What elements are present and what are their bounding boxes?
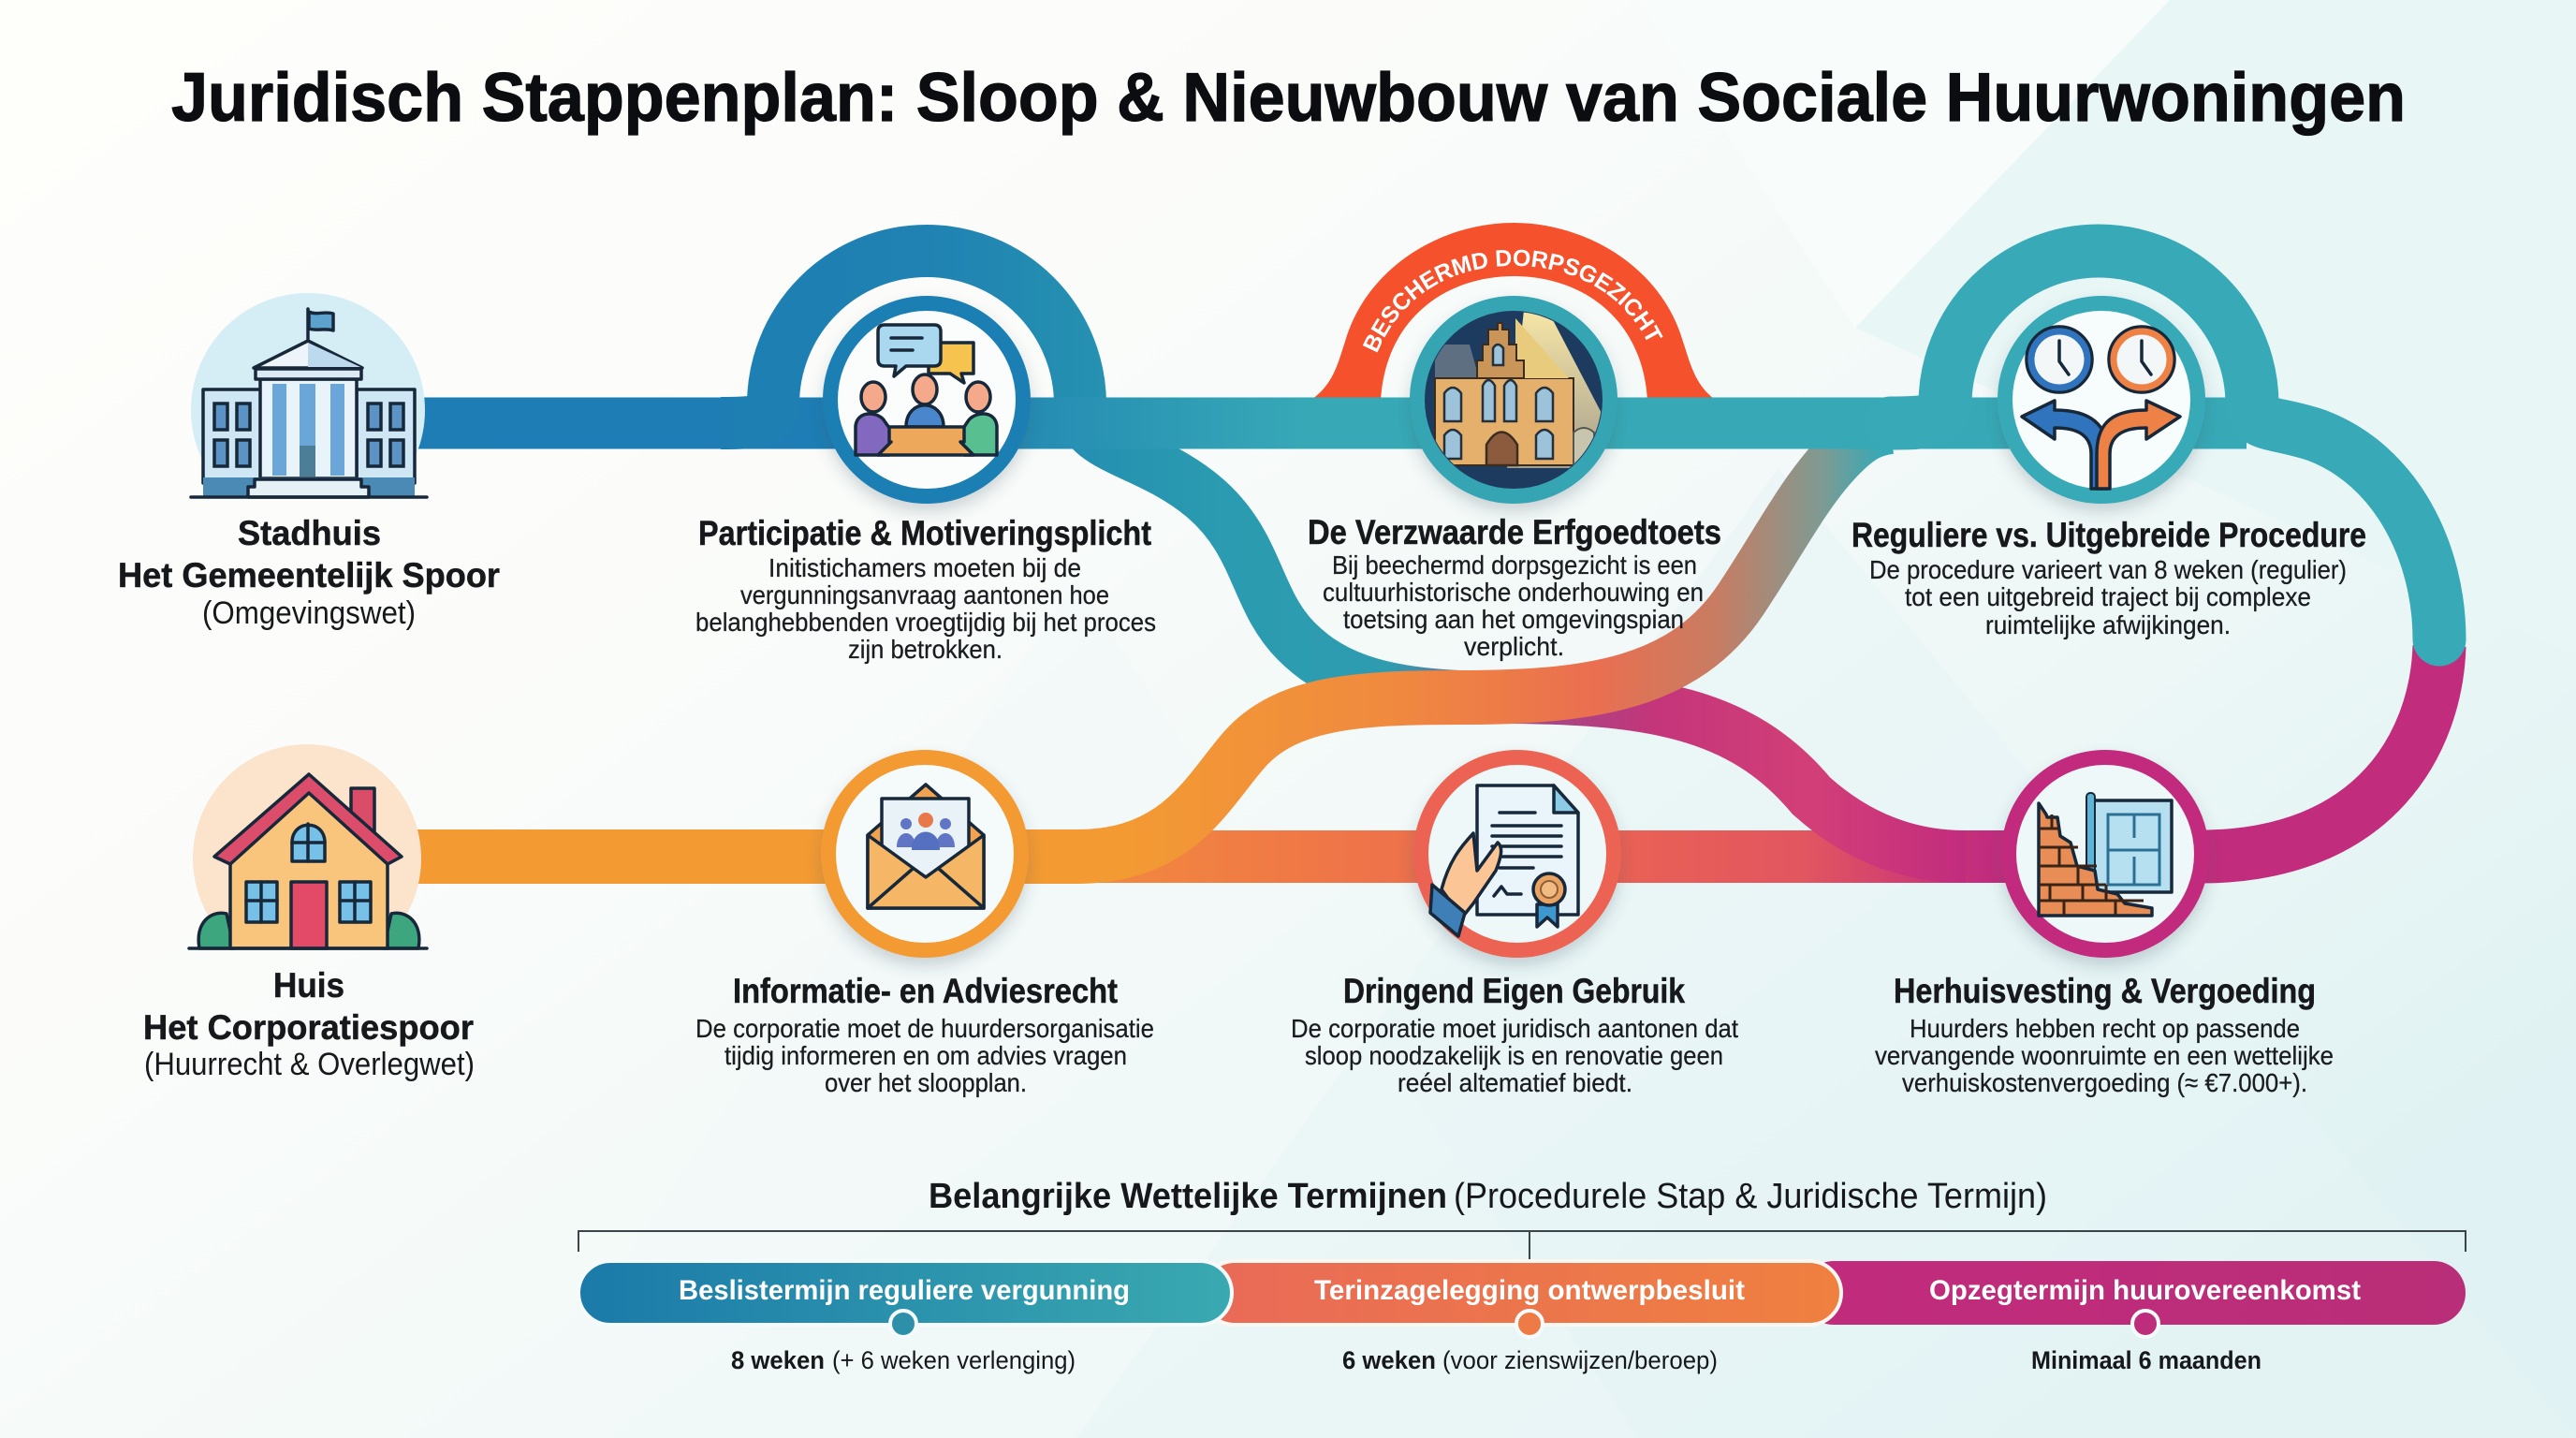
route: magenta link xyxy=(2200,646,2439,857)
route: teal loop xyxy=(1891,251,2439,639)
body text: Huurders hebben recht op passende xyxy=(1910,1014,2300,1043)
deadline values: Minimaal 6 maanden xyxy=(2031,1346,2261,1374)
step: participatie xyxy=(695,303,1156,664)
step: informatie xyxy=(695,757,1154,1097)
bar labels: Opzegtermijn huurovereenkomst xyxy=(1929,1275,2361,1306)
step: eigen gebruik xyxy=(1291,757,1738,1097)
body text xyxy=(1875,1014,2334,1097)
body text: sloop noodzakelijk is en renovatie geen xyxy=(1305,1041,1723,1070)
body text: toetsing aan het omgevingspian xyxy=(1343,605,1684,634)
heading: Herhuisvesting & Vergoeding xyxy=(1894,972,2316,1010)
node ring xyxy=(2009,757,2202,950)
deadline values: 8 weken xyxy=(731,1346,825,1374)
body text: over het sloopplan. xyxy=(825,1068,1027,1097)
icon: heritage building xyxy=(1435,310,1605,468)
heading: Reguliere vs. Uitgebreide Procedure xyxy=(1852,516,2366,554)
deadlines section xyxy=(578,1177,2466,1374)
step: erfgoedtoets xyxy=(1308,303,1721,661)
route: blue left track xyxy=(412,397,945,449)
node ring xyxy=(830,303,1023,496)
route: top track xyxy=(936,397,2247,449)
body text: De procedure varieert van 8 weken (regulier) xyxy=(1869,555,2347,584)
icon: city hall xyxy=(189,293,429,499)
body text: De corporatie moet juridisch aantonen dat xyxy=(1291,1014,1738,1043)
deadline values: (voor zienswijzen/beroep) xyxy=(1442,1346,1718,1374)
stadhuis label: (Omgevingswet) xyxy=(202,595,416,631)
body text: ruimtelijke afwijkingen. xyxy=(1985,610,2231,639)
icon: house xyxy=(189,744,427,973)
body text xyxy=(1869,555,2347,639)
body text: Initistichamers moeten bij de xyxy=(768,553,1081,582)
body text xyxy=(1291,1014,1738,1097)
body text: reéel altematief biedt. xyxy=(1398,1068,1632,1097)
huis label: (Huurrecht & Overlegwet) xyxy=(144,1047,475,1082)
route network xyxy=(376,223,2439,857)
stadhuis label: Het Gemeentelijk Spoor xyxy=(118,556,500,594)
body text: verhuiskostenvergoeding (≈ €7.000+). xyxy=(1902,1068,2307,1097)
body text: vervangende woonruimte en een wettelijke xyxy=(1875,1041,2334,1070)
deadlines heading: Belangrijke Wettelijke Termijnen xyxy=(929,1177,1447,1216)
route: orange rising xyxy=(376,427,1891,857)
body text: tot een uitgebreid traject bij complexe xyxy=(1905,582,2311,611)
icon: clocks and arrows xyxy=(2022,327,2180,489)
stadhuis label xyxy=(118,514,500,631)
body text xyxy=(695,1014,1154,1097)
deadline values: 6 weken xyxy=(1342,1346,1436,1374)
node ring xyxy=(1417,303,1610,496)
step: procedure xyxy=(1852,303,2366,639)
bar: terinzagelegging xyxy=(1203,1261,1841,1325)
body text: tijdig informeren en om advies vragen xyxy=(724,1041,1127,1070)
bar: beslistermijn xyxy=(578,1261,1232,1325)
huis label xyxy=(143,966,475,1082)
body text: Bij beechermd dorpsgezicht is een xyxy=(1332,550,1697,580)
icon: document and hand xyxy=(1430,785,1578,936)
bar: opzegtermijn xyxy=(1802,1261,2466,1325)
icon: envelope xyxy=(868,785,984,908)
body text xyxy=(695,553,1156,664)
heading: Dringend Eigen Gebruik xyxy=(1343,972,1685,1010)
body text: cultuurhistorische onderhouwing en xyxy=(1323,578,1704,607)
heading: Participatie & Motiveringsplicht xyxy=(698,514,1151,552)
huis label: Het Corporatiespoor xyxy=(143,1008,474,1047)
body text: vergunningsanvraag aantonen hoe xyxy=(740,580,1109,609)
node ring xyxy=(2005,303,2198,496)
timeline dots xyxy=(890,1311,2159,1337)
route: bottom track xyxy=(1076,830,2209,883)
stadhuis label: Stadhuis xyxy=(238,514,381,552)
huis label: Huis xyxy=(273,966,344,1005)
icon: meeting xyxy=(856,325,997,455)
deadline values xyxy=(731,1346,2261,1374)
bar labels xyxy=(679,1275,2361,1306)
body text: belanghebbenden vroegtijdig bij het proces xyxy=(695,608,1156,637)
heading: Informatie- en Adviesrecht xyxy=(733,972,1118,1010)
bar labels: Terinzagelegging ontwerpbesluit xyxy=(1314,1275,1745,1306)
heading: De Verzwaarde Erfgoedtoets xyxy=(1308,513,1721,551)
arc label: BESCHERMD DORPSGEZICHT xyxy=(1363,249,1662,352)
route: blue S curve xyxy=(721,251,1966,857)
body text: De corporatie moet de huurdersorganisatie xyxy=(695,1014,1154,1043)
body text: zijn betrokken. xyxy=(848,635,1003,664)
body text: verplicht. xyxy=(1464,632,1564,661)
bar labels: Beslistermijn reguliere vergunning xyxy=(679,1275,1130,1306)
body text xyxy=(1323,550,1704,661)
step: herhuisvesting xyxy=(1875,757,2334,1097)
title: Juridisch Stappenplan: Sloop & Nieuwbouw van Sociale Huurwoningen xyxy=(171,60,2406,136)
deadlines heading: (Procedurele Stap & Juridische Termijn) xyxy=(1454,1177,2047,1216)
bracket xyxy=(578,1231,2466,1259)
route: protected village arc xyxy=(1310,223,1717,401)
node ring xyxy=(1421,757,1614,950)
deadline values: (+ 6 weken verlenging) xyxy=(832,1346,1076,1374)
icon: bricks and floor plan xyxy=(2039,793,2172,916)
node ring xyxy=(828,757,1021,950)
